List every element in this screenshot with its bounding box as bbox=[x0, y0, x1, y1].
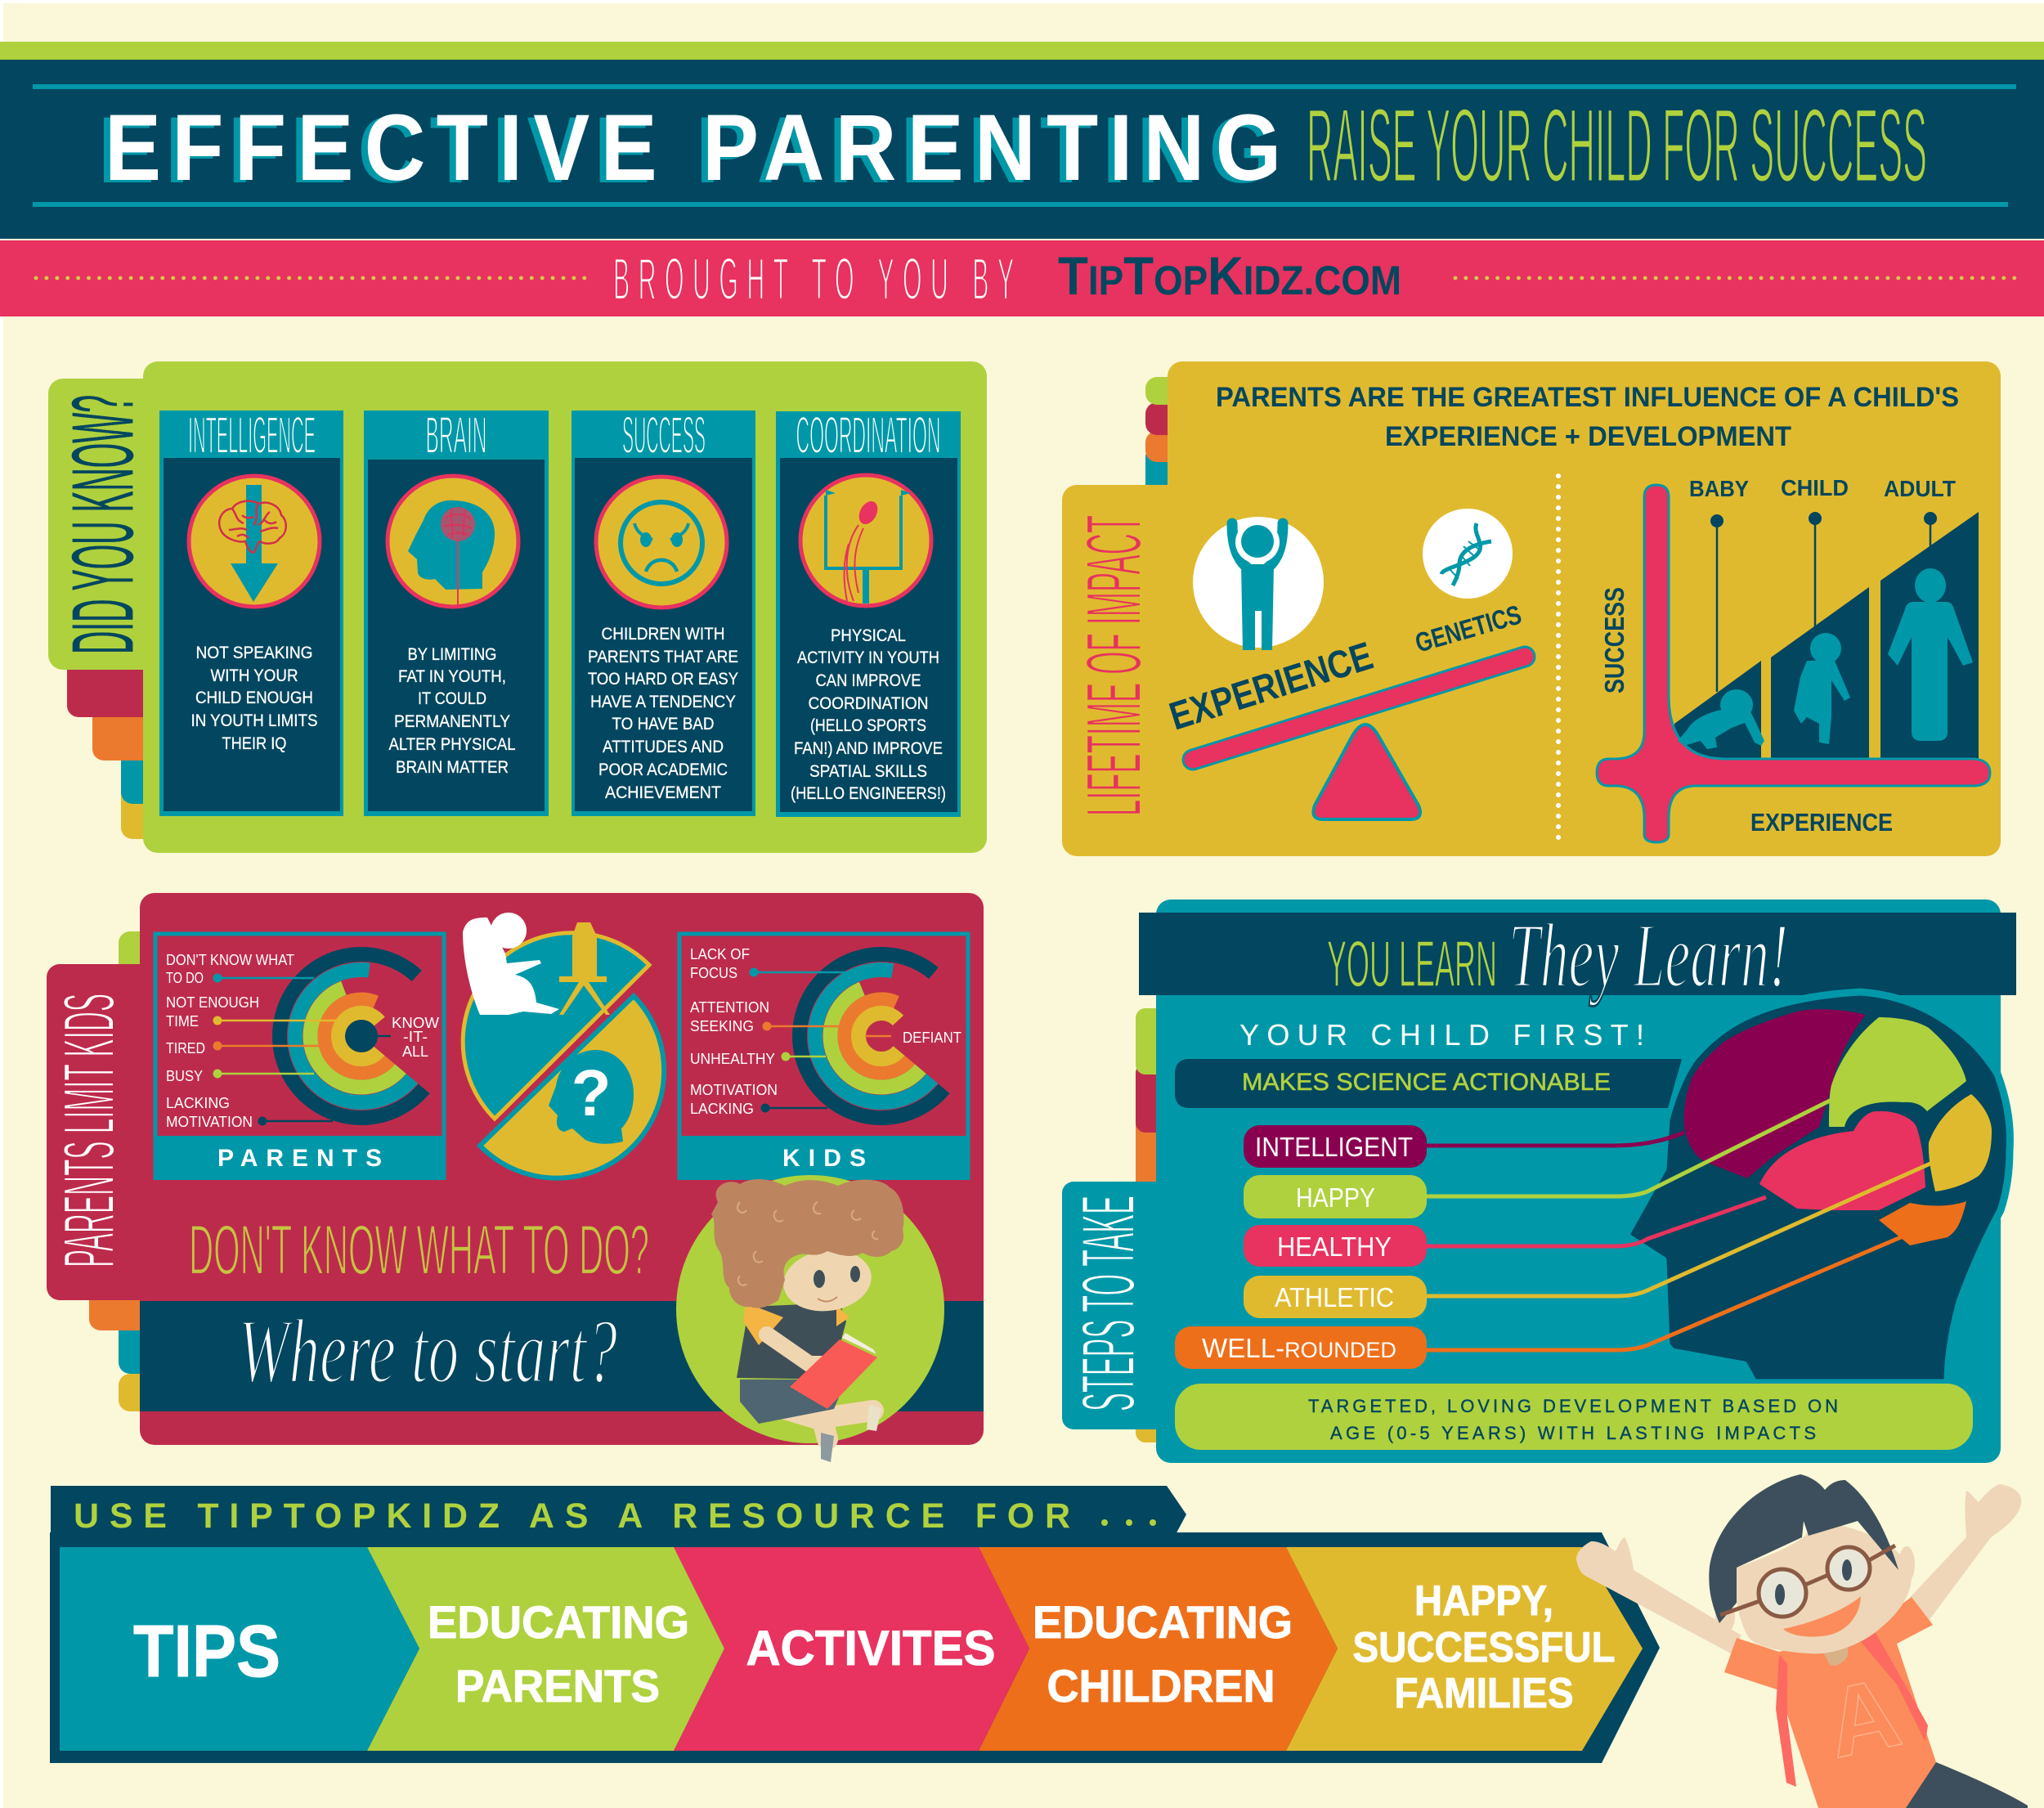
heading: PARENTS ARE THE GREATEST INFLUENCE OF A CHILD'S bbox=[1216, 382, 1959, 413]
science bar: MAKES SCIENCE ACTIONABLE bbox=[1242, 1069, 1611, 1096]
column: success: ACHIEVEMENT bbox=[605, 783, 721, 802]
column: success: ATTITUDES AND bbox=[603, 738, 724, 756]
sleeves bbox=[743, 1303, 783, 1345]
heading: EXPERIENCE + DEVELOPMENT bbox=[1385, 421, 1791, 452]
success vs experience chart: ADULT bbox=[1884, 476, 1956, 501]
targeted development callout bbox=[1175, 1384, 1973, 1450]
chart labels: KNOW bbox=[392, 1014, 440, 1031]
pill: athletic bbox=[1244, 1276, 1427, 1318]
chart labels: MOTIVATION bbox=[690, 1081, 778, 1098]
heading: where to start: Where to start? bbox=[238, 1301, 617, 1402]
pill: well-rounded bbox=[1175, 1326, 1427, 1369]
chart labels: LACK OF bbox=[690, 945, 750, 962]
panel: lifetime of impact bbox=[1062, 361, 2001, 856]
title: EFFECTIVE PARENTING bbox=[105, 96, 1281, 200]
chart labels bbox=[166, 951, 440, 1130]
arrow: happy successful families: HAPPY, bbox=[1414, 1577, 1553, 1625]
pill: healthy: HEALTHY bbox=[1277, 1232, 1392, 1262]
column: brain: BY LIMITING bbox=[407, 645, 497, 664]
arrow: educating children: CHILDREN bbox=[1047, 1660, 1275, 1712]
column: brain: PERMANENTLY bbox=[394, 712, 510, 731]
pill: intelligent bbox=[1244, 1125, 1427, 1168]
icon: split circle parent and child: ? bbox=[572, 1057, 611, 1129]
column: intelligence: IN YOUTH LIMITS bbox=[191, 711, 317, 730]
chart labels: MOTIVATION bbox=[166, 1113, 253, 1130]
column: success: HAVE A TENDENCY bbox=[590, 693, 736, 711]
chart labels: NOT ENOUGH bbox=[166, 994, 259, 1011]
heading: you learn they learn: They Learn! bbox=[1508, 905, 1788, 1007]
pants bbox=[1900, 1762, 2028, 1808]
brought to you by strip bbox=[0, 240, 2044, 316]
head with question mark bbox=[549, 1050, 634, 1144]
pill: intelligent: INTELLIGENT bbox=[1255, 1132, 1413, 1162]
chart labels: SEEKING bbox=[690, 1017, 754, 1034]
your child first: YOUR CHILD FIRST! bbox=[1239, 1018, 1644, 1052]
icon: split circle parent and child bbox=[463, 913, 664, 1178]
column: intelligence bbox=[159, 406, 343, 816]
arrow: tips: TIPS bbox=[133, 1611, 280, 1693]
targeted development callout: TARGETED, LOVING DEVELOPMENT BASED ON bbox=[1308, 1396, 1838, 1416]
brain: occipital bbox=[1929, 1094, 1992, 1191]
column: coordination: FAN!) AND IMPROVE bbox=[794, 739, 943, 758]
column: brain: IT COULD bbox=[418, 689, 486, 708]
arrow: educating parents bbox=[367, 1547, 724, 1751]
column: coordination: (HELLO SPORTS bbox=[810, 716, 926, 735]
arrow: happy successful families: SUCCESSFUL bbox=[1352, 1624, 1616, 1671]
leader lines bbox=[213, 973, 391, 1125]
success vs experience chart: SUCCESS bbox=[1599, 587, 1629, 693]
column: success: TO HAVE BAD bbox=[612, 715, 715, 734]
arrow: educating parents: PARENTS bbox=[455, 1660, 660, 1712]
arrow: educating parents: EDUCATING bbox=[428, 1596, 689, 1648]
chart labels: LACKING bbox=[166, 1094, 230, 1111]
chart labels: ATTENTION bbox=[690, 998, 769, 1016]
panel: parents limit kids bbox=[47, 893, 997, 1462]
panel: parents limit kids: DON'T KNOW WHAT TO DO? bbox=[189, 1211, 649, 1290]
seesaw beam bbox=[1193, 657, 1525, 760]
text: COORDINATION bbox=[796, 406, 940, 464]
panel: lifetime of impact: LIFETIME OF IMPACT bbox=[1070, 515, 1158, 816]
face bbox=[779, 1245, 876, 1317]
pill: happy: HAPPY bbox=[1296, 1182, 1375, 1213]
column: intelligence: NOT SPEAKING bbox=[196, 644, 312, 662]
chart labels: -IT- bbox=[403, 1028, 428, 1045]
icon: baby bbox=[1678, 689, 1764, 749]
pill: athletic: ATHLETIC bbox=[1275, 1282, 1394, 1312]
resource arrow banner bbox=[50, 1486, 1660, 1763]
parents radial chart bbox=[154, 921, 477, 1180]
arrow: activites bbox=[674, 1547, 1029, 1751]
pill: healthy bbox=[1244, 1225, 1427, 1267]
heading: you learn they learn: YOU LEARN bbox=[1327, 927, 1497, 1000]
column: coordination: CAN IMPROVE bbox=[816, 671, 921, 690]
logo: TIPTOPKIDZ.COM bbox=[1058, 245, 1401, 306]
heading bbox=[1216, 382, 1959, 452]
shoes bbox=[867, 1405, 881, 1431]
arrow: happy successful families: FAMILIES bbox=[1395, 1670, 1573, 1717]
heading: you learn they learn bbox=[1327, 905, 1788, 1007]
arrow: activites: ACTIVITES bbox=[746, 1621, 996, 1676]
column: coordination bbox=[776, 406, 961, 817]
easel bbox=[559, 922, 610, 1015]
shirt bbox=[737, 1303, 846, 1380]
column: brain: BRAIN bbox=[425, 406, 487, 464]
column: coordination: PHYSICAL bbox=[831, 626, 906, 645]
icon: child bbox=[1794, 633, 1850, 744]
seated figure bbox=[463, 917, 559, 1015]
column: brain: ALTER PHYSICAL bbox=[389, 735, 515, 754]
column: coordination: COORDINATION bbox=[808, 694, 929, 713]
curly hair bbox=[711, 1179, 903, 1308]
column: success: TOO HARD OR EASY bbox=[588, 670, 738, 689]
brain: cerebellum bbox=[1879, 1201, 1966, 1245]
chart silhouette bars bbox=[1674, 512, 1979, 765]
parents radial chart: PARENTS bbox=[217, 1145, 382, 1172]
column: success: POOR ACADEMIC bbox=[598, 760, 728, 779]
chart labels: DEFIANT bbox=[903, 1029, 961, 1046]
seesaw diagram bbox=[1164, 509, 1525, 819]
chart labels bbox=[690, 945, 961, 1117]
panel: did you know bbox=[48, 361, 987, 853]
face bbox=[1736, 1521, 1912, 1653]
brought to you by text: BROUGHT TO YOU BY bbox=[613, 246, 1014, 312]
chart labels: TIRED bbox=[166, 1039, 205, 1057]
right arm bbox=[1905, 1484, 2021, 1627]
chart labels: TO DO bbox=[166, 969, 204, 986]
backpack straps bbox=[1776, 1627, 1928, 1787]
icon: goal post and football bbox=[800, 475, 931, 606]
ribbon: USE TIPTOPKIDZ AS A RESOURCE FOR bbox=[74, 1496, 1070, 1536]
arrow: educating children bbox=[979, 1547, 1338, 1751]
hair bbox=[1709, 1474, 1898, 1623]
column: brain: BRAIN MATTER bbox=[396, 758, 509, 777]
brain: limbic bbox=[1759, 1111, 1925, 1210]
seesaw diagram: GENETICS bbox=[1412, 599, 1525, 658]
chart labels: TIME bbox=[166, 1012, 199, 1030]
column: brain: FAT IN YOUTH, bbox=[398, 667, 506, 686]
panel: parents limit kids: PARENTS LIMIT KIDS bbox=[48, 994, 129, 1267]
success vs experience chart bbox=[1597, 475, 1990, 842]
column: success bbox=[572, 406, 755, 816]
illustration: happy boy with glasses bbox=[1576, 1474, 2028, 1808]
brain: parietal bbox=[1829, 1017, 1966, 1127]
legs bbox=[777, 1400, 873, 1439]
kids radial chart bbox=[678, 921, 997, 1180]
chart axes bbox=[1597, 485, 1990, 842]
chart labels: FOCUS bbox=[690, 964, 737, 981]
arrow: happy successful families bbox=[1286, 1547, 1643, 1751]
success vs experience chart: BABY bbox=[1689, 476, 1749, 501]
rings bbox=[246, 921, 477, 1151]
arrow: tips bbox=[60, 1547, 419, 1751]
leader lines bbox=[749, 968, 891, 1112]
icon: experience figure bbox=[1193, 517, 1324, 650]
targeted development callout: AGE (0-5 YEARS) WITH LASTING IMPACTS bbox=[1330, 1423, 1816, 1443]
column: intelligence: THEIR IQ bbox=[222, 734, 286, 753]
column: coordination: ACTIVITY IN YOUTH bbox=[797, 648, 939, 667]
title: EFFECTIVE PARENTING bbox=[98, 98, 1275, 203]
shirt bbox=[1724, 1597, 1936, 1808]
chart labels: BUSY bbox=[166, 1067, 203, 1084]
icon: dna bbox=[1423, 509, 1513, 599]
column: success: PARENTS THAT ARE bbox=[588, 648, 738, 666]
success vs experience chart: EXPERIENCE bbox=[1750, 808, 1893, 837]
success vs experience chart: CHILD bbox=[1781, 475, 1849, 500]
icon: head with brain bbox=[388, 476, 518, 607]
column: brain bbox=[364, 406, 549, 816]
column: success: CHILDREN WITH bbox=[602, 625, 724, 644]
column: coordination: (HELLO ENGINEERS!) bbox=[791, 784, 946, 803]
column: success: SUCCESS bbox=[622, 406, 706, 464]
seesaw diagram: EXPERIENCE bbox=[1164, 635, 1378, 738]
column: coordination: SPATIAL SKILLS bbox=[809, 762, 927, 781]
pill: happy bbox=[1244, 1175, 1427, 1218]
shorts bbox=[740, 1380, 846, 1424]
glasses bbox=[1720, 1546, 1895, 1617]
left arm bbox=[1576, 1537, 1741, 1653]
arrow: educating children: EDUCATING bbox=[1033, 1596, 1293, 1648]
chart labels: LACKING bbox=[690, 1100, 754, 1117]
book bbox=[790, 1339, 877, 1409]
header banner bbox=[0, 42, 2044, 239]
neck bbox=[1819, 1644, 1848, 1666]
icon: adult bbox=[1888, 568, 1973, 741]
column: intelligence: WITH YOUR bbox=[211, 666, 298, 685]
icon: angry face bbox=[596, 477, 727, 608]
illustration: child reading bbox=[676, 1175, 944, 1462]
chart labels: UNHEALTHY bbox=[690, 1050, 775, 1067]
chart pins bbox=[1710, 512, 1937, 692]
connector lines bbox=[1427, 1100, 1932, 1350]
illustration: head with brain regions bbox=[1625, 992, 2010, 1383]
panel: did you know: INTELLIGENCE bbox=[188, 406, 316, 464]
icon: brain with down arrow bbox=[189, 476, 320, 607]
rings bbox=[766, 921, 997, 1151]
banner bbox=[1139, 913, 2016, 995]
panel: steps to take bbox=[1062, 900, 2016, 1463]
brain: frontal bbox=[1684, 1009, 1866, 1178]
science bar bbox=[1175, 1059, 1682, 1108]
panel: steps to take: STEPS TO TAKE bbox=[1067, 1196, 1150, 1411]
mouth bbox=[1783, 1596, 1861, 1637]
kids radial chart: KIDS bbox=[782, 1145, 866, 1172]
arm bbox=[767, 1335, 838, 1364]
column: intelligence: CHILD ENOUGH bbox=[195, 689, 313, 707]
chart labels: DON'T KNOW WHAT bbox=[166, 951, 294, 968]
ears bbox=[1715, 1600, 1735, 1633]
chart labels: ALL bbox=[402, 1043, 428, 1060]
shirt letter: A bbox=[1818, 1657, 1909, 1779]
seesaw fulcrum bbox=[1313, 725, 1420, 819]
pill: well-rounded: WELL-ROUNDED bbox=[1202, 1333, 1396, 1363]
ribbon bbox=[51, 1486, 1186, 1537]
